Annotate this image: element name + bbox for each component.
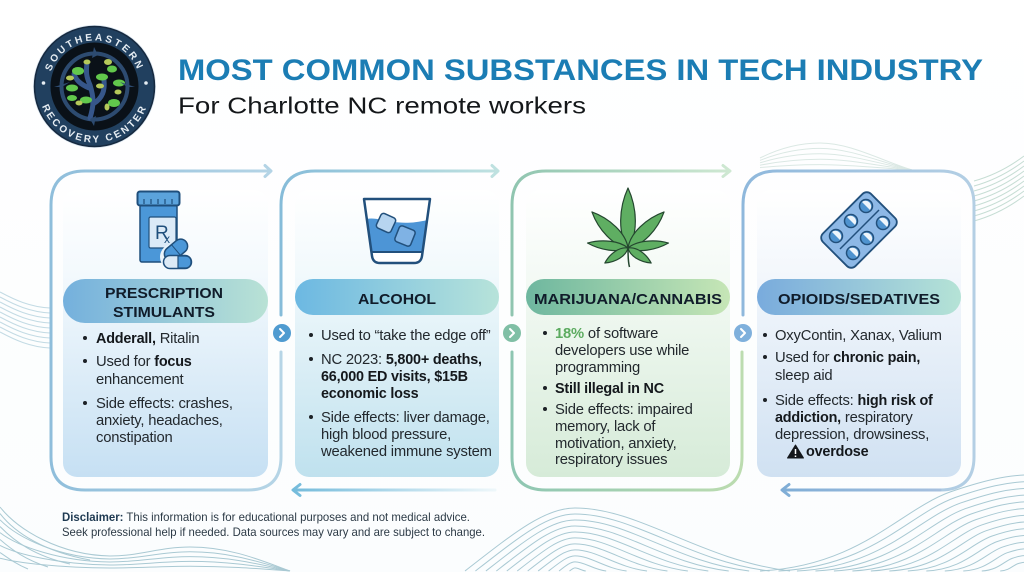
bullet list [83, 331, 233, 446]
panel: marijuana/cannabis [512, 166, 742, 490]
logo: Southeastern Recovery Center: RECOVERY CENTER [42, 104, 146, 142]
heading pill: ALCOHOL [358, 291, 436, 308]
card outline and arrow [512, 166, 730, 315]
bullet list: programming [555, 360, 640, 376]
icon: prescription bottle [138, 192, 192, 270]
bullet list: Side effects: impaired [555, 402, 693, 418]
bullet list: Used to “take the edge off” [321, 328, 491, 344]
bullet list [309, 328, 492, 460]
panel: opioids/sedatives [743, 171, 974, 496]
bullet list: Adderall, Ritalin [96, 331, 199, 347]
bullet list: overdose [806, 444, 869, 460]
icon: prescription bottle: R [155, 223, 169, 244]
bullet list: Side effects: high risk of [775, 393, 933, 409]
bullet list: enhancement [96, 372, 184, 388]
bullet list: sleep aid [775, 368, 832, 384]
inner panel [63, 190, 268, 477]
bullet list: memory, lack of [555, 419, 656, 435]
connector: chevron 2 [503, 324, 521, 342]
logo: Southeastern Recovery Center [33, 25, 156, 148]
connector: chevron 3 [734, 324, 752, 342]
heading pill: STIMULANTS [113, 304, 215, 321]
bullet list: Used for focus [96, 354, 192, 370]
bullet list: weakened immune system [320, 444, 492, 460]
subtitle: For Charlotte NC remote workers [178, 92, 586, 118]
icon: glass with ice [364, 199, 430, 263]
panel: alcohol [281, 166, 499, 496]
heading pill [63, 279, 268, 323]
bullet list: OxyContin, Xanax, Valium [775, 328, 942, 344]
icon: prescription bottle: x [164, 232, 170, 246]
bullet list: Used for chronic pain, [775, 350, 920, 366]
bullet list: anxiety, headaches, [96, 413, 223, 429]
title: MOST COMMON SUBSTANCES IN TECH INDUSTRY [178, 54, 983, 87]
bottom arrow [782, 484, 940, 496]
inner panel [757, 190, 961, 477]
bullet list [543, 326, 693, 468]
panel: prescription stimulants [51, 166, 281, 490]
card outline and arrow [51, 166, 281, 490]
card outline and arrows [281, 166, 498, 315]
icon: warning triangle [788, 445, 804, 458]
card outline [743, 171, 974, 490]
bullet list [763, 328, 942, 460]
bullet list: addiction, respiratory [775, 410, 913, 426]
disclaimer: Seek professional help if needed. Data sources may vary and are subject to change. [62, 525, 485, 539]
heading pill [757, 279, 961, 315]
logo: Southeastern Recovery Center: SOUTHEASTERN [45, 34, 144, 71]
bullet list: depression, drowsiness, [775, 427, 929, 443]
connector: chevron 1 [273, 324, 291, 342]
icon: cannabis leaf [587, 188, 669, 267]
heading pill: MARIJUANA/CANNABIS [534, 291, 722, 308]
disclaimer [62, 510, 485, 539]
icon: blister pack [819, 190, 899, 270]
bullet list: developers use while [555, 343, 689, 359]
bullet list: 66,000 ED visits, $15B [321, 369, 468, 385]
disclaimer: Disclaimer: This information is for educational purposes and not medical advice. [62, 510, 470, 524]
heading pill: PRESCRIPTION [105, 285, 223, 302]
bullet list: motivation, anxiety, [555, 436, 677, 452]
bullet list: constipation [96, 430, 173, 446]
bullet list: respiratory issues [555, 452, 667, 468]
heading pill [295, 279, 499, 315]
bullet list: high blood pressure, [321, 427, 451, 443]
bullet list: Still illegal in NC [555, 381, 664, 397]
bullet list: economic loss [321, 386, 419, 402]
bullet list: 18% of software [555, 326, 658, 342]
heading pill [526, 279, 730, 315]
inner panel [526, 190, 730, 477]
bullet list: Side effects: crashes, [96, 396, 233, 412]
bullet list: Side effects: liver damage, [321, 410, 490, 426]
bullet list: NC 2023: 5,800+ deaths, [321, 352, 482, 368]
inner panel [295, 190, 499, 477]
heading pill: OPIOIDS/SEDATIVES [778, 291, 940, 308]
